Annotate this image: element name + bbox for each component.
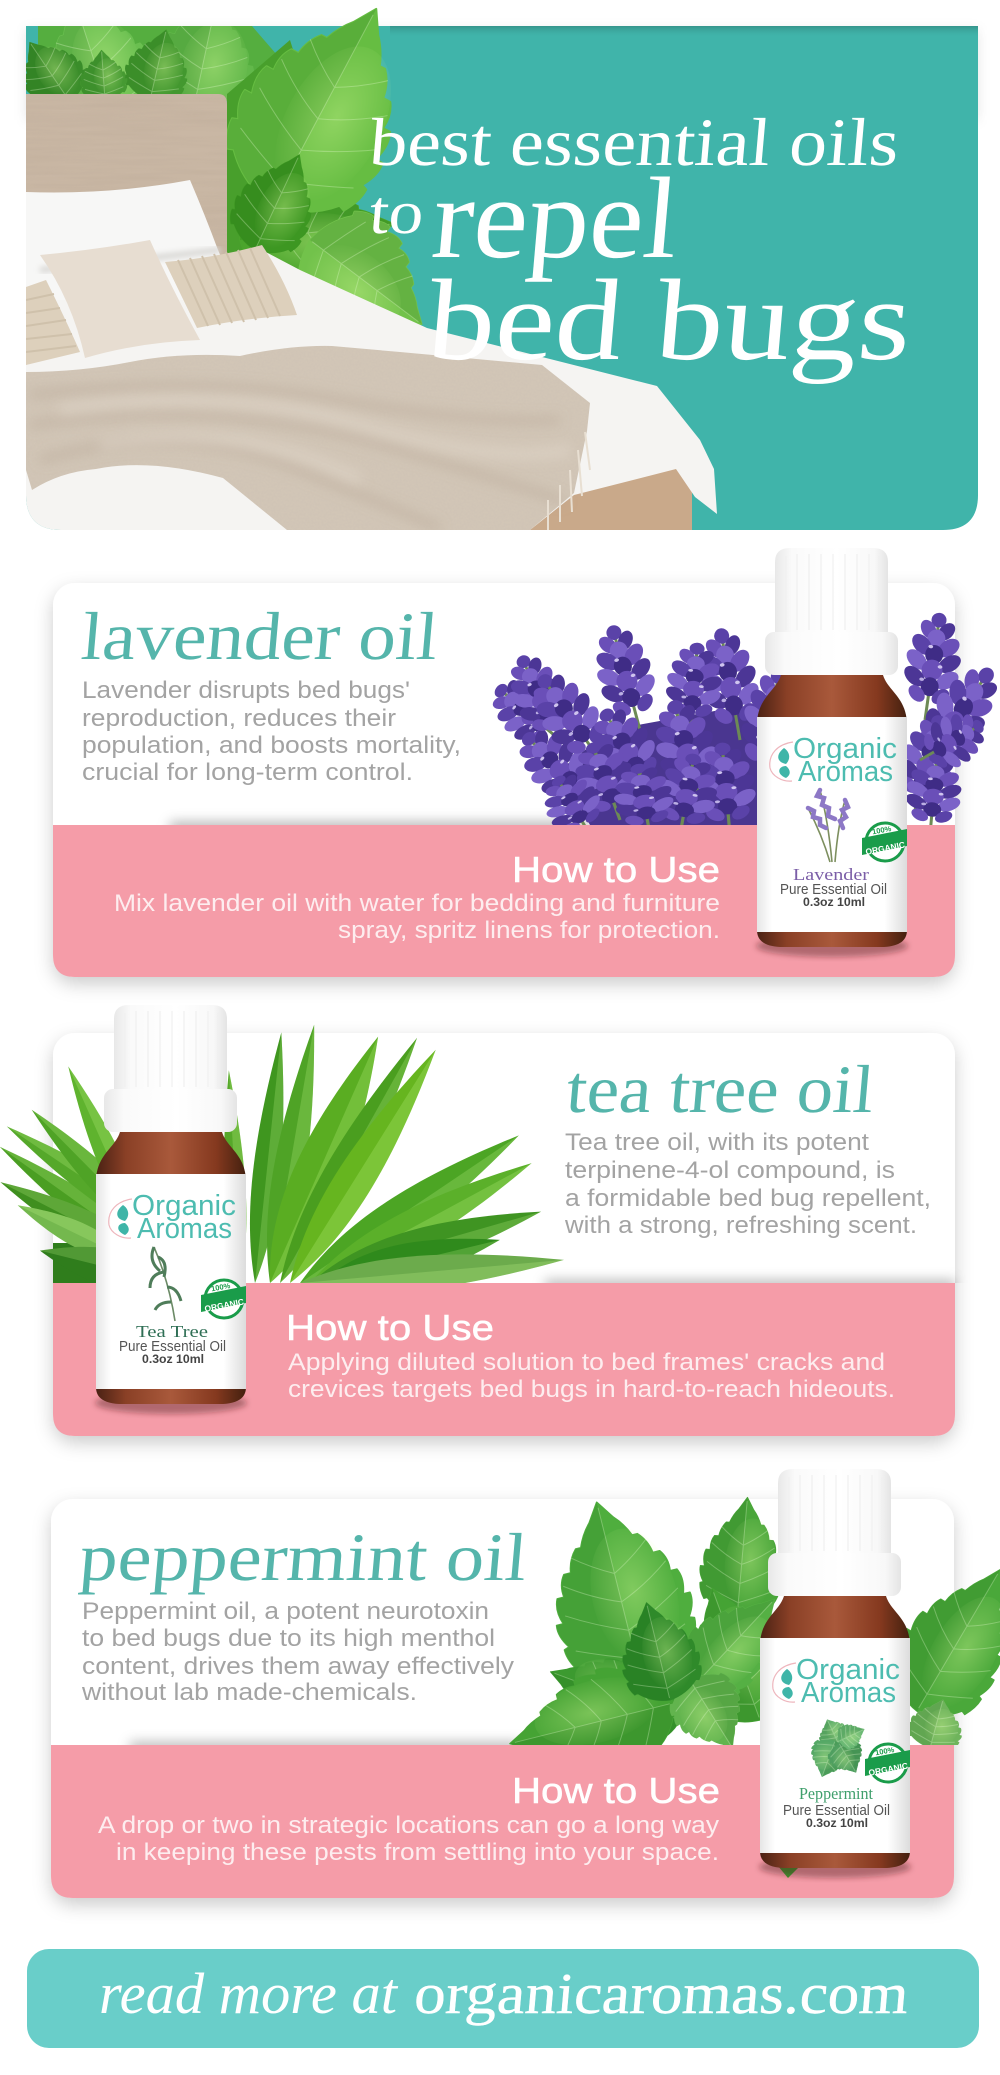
image: tea tree leaves [0, 1022, 565, 1301]
how to use: crevices targets bed bugs in hard-to-reach hideouts. [288, 1376, 895, 1403]
hero soft shadow [26, 30, 978, 120]
bottle: tea tree: 0.3oz 10ml [142, 1352, 204, 1366]
description [82, 677, 461, 786]
how to use: How to Use [286, 1307, 494, 1348]
bottle: tea tree: Aromas [137, 1213, 232, 1245]
card background [53, 583, 955, 977]
top band shading [390, 26, 978, 38]
title [367, 104, 917, 385]
description: Peppermint oil, a potent neurotoxin [82, 1598, 489, 1625]
duvet [26, 250, 717, 530]
panel: hero [4, 0, 978, 530]
panel: peppermint oil [51, 1469, 1000, 1898]
bottle: tea tree: Organic [132, 1190, 236, 1222]
website url: organicaromas.com [412, 1961, 912, 2026]
bottle: lavender: Lavender [793, 865, 869, 884]
how to use: How to Use [512, 849, 720, 890]
title: repel [428, 154, 684, 283]
label leaves [804, 1713, 871, 1783]
label sprig [150, 1247, 181, 1321]
description: crucial for long-term control. [82, 759, 413, 786]
white pillow [26, 180, 220, 300]
description: without lab made-chemicals. [81, 1679, 417, 1706]
description: Lavender disrupts bed bugs' [82, 677, 410, 704]
pink band [51, 1745, 954, 1898]
bottle: peppermint: Organic [796, 1654, 900, 1686]
how to use: in keeping these pests from settling into your space. [116, 1839, 719, 1866]
bottle: peppermint: Pure Essential Oil [783, 1803, 890, 1819]
shadow above pink band [540, 1273, 960, 1283]
duvet shading [40, 250, 220, 270]
how to use [286, 1307, 895, 1403]
description: content, drives them away effectively [82, 1653, 514, 1680]
ribbed pillow left [26, 280, 80, 365]
description: with a strong, refreshing scent. [564, 1212, 917, 1239]
ribbed pillow right [165, 245, 297, 328]
card background [51, 1499, 954, 1898]
how to use: A drop or two in strategic locations can go a long way [98, 1812, 719, 1839]
shadow above pink band [164, 815, 590, 825]
headboard [26, 94, 227, 260]
bottle: lavender: Organic [793, 733, 897, 765]
bottle: lavender: Aromas [798, 756, 893, 788]
bottle: peppermint [759, 1469, 911, 1878]
how to use: spray, spritz linens for protection. [338, 917, 720, 944]
call to action [27, 1949, 979, 2048]
image: lavender bunch [492, 612, 997, 825]
card background [53, 1033, 955, 1436]
how to use: Mix lavender oil with water for bedding and furniture [114, 890, 720, 917]
description: a formidable bed bug repellent, [565, 1185, 931, 1212]
how to use [98, 1770, 720, 1866]
pink band [53, 1283, 955, 1436]
title: best essential oils [367, 104, 902, 180]
banner background [27, 1949, 979, 2048]
bottle: tea tree [95, 1005, 247, 1414]
image: peppermint leaves [509, 1496, 1000, 1745]
bottle: lavender: 0.3oz 10ml [803, 895, 865, 909]
how to use: Applying diluted solution to bed frames' cracks and [288, 1349, 885, 1376]
title: to [367, 179, 427, 247]
leaf fragment under bottle [778, 1866, 798, 1878]
panel: tea tree oil [0, 1005, 955, 1436]
bottle: lavender [756, 548, 908, 957]
heading: tea tree oil [564, 1051, 877, 1127]
pink band [53, 825, 955, 977]
description [564, 1129, 931, 1239]
description: terpinene-4-ol compound, is [565, 1157, 895, 1184]
heading: peppermint oil [77, 1519, 530, 1595]
image: mint leaves behind bed [26, 8, 422, 325]
description: population, and boosts mortality, [82, 732, 461, 759]
bottle: tea tree: Tea Tree [136, 1322, 208, 1341]
bottle: lavender: Pure Essential Oil [780, 882, 887, 898]
bottle: peppermint: Peppermint [799, 1784, 873, 1803]
title: bed bugs [423, 256, 917, 385]
panel: lavender oil [53, 548, 1000, 977]
description: Tea tree oil, with its potent [565, 1129, 869, 1156]
bed base wood [530, 469, 692, 530]
description [81, 1598, 514, 1706]
description: reproduction, reduces their [82, 705, 396, 732]
how to use: How to Use [512, 1770, 720, 1811]
how to use [114, 849, 720, 944]
throw blanket [26, 346, 590, 530]
hero teal background [26, 26, 978, 530]
heading: lavender oil [79, 598, 441, 674]
description: to bed bugs due to its high menthol [82, 1625, 495, 1652]
beige pillow [40, 240, 200, 358]
bottle: peppermint: 0.3oz 10ml [806, 1816, 868, 1830]
image: bed [26, 94, 717, 530]
bottle: tea tree: Pure Essential Oil [119, 1339, 226, 1355]
read more text: read more at [99, 1961, 399, 2026]
label sprig [808, 790, 848, 862]
shadow above pink band [125, 1735, 516, 1745]
bottle: peppermint: Aromas [801, 1677, 896, 1709]
